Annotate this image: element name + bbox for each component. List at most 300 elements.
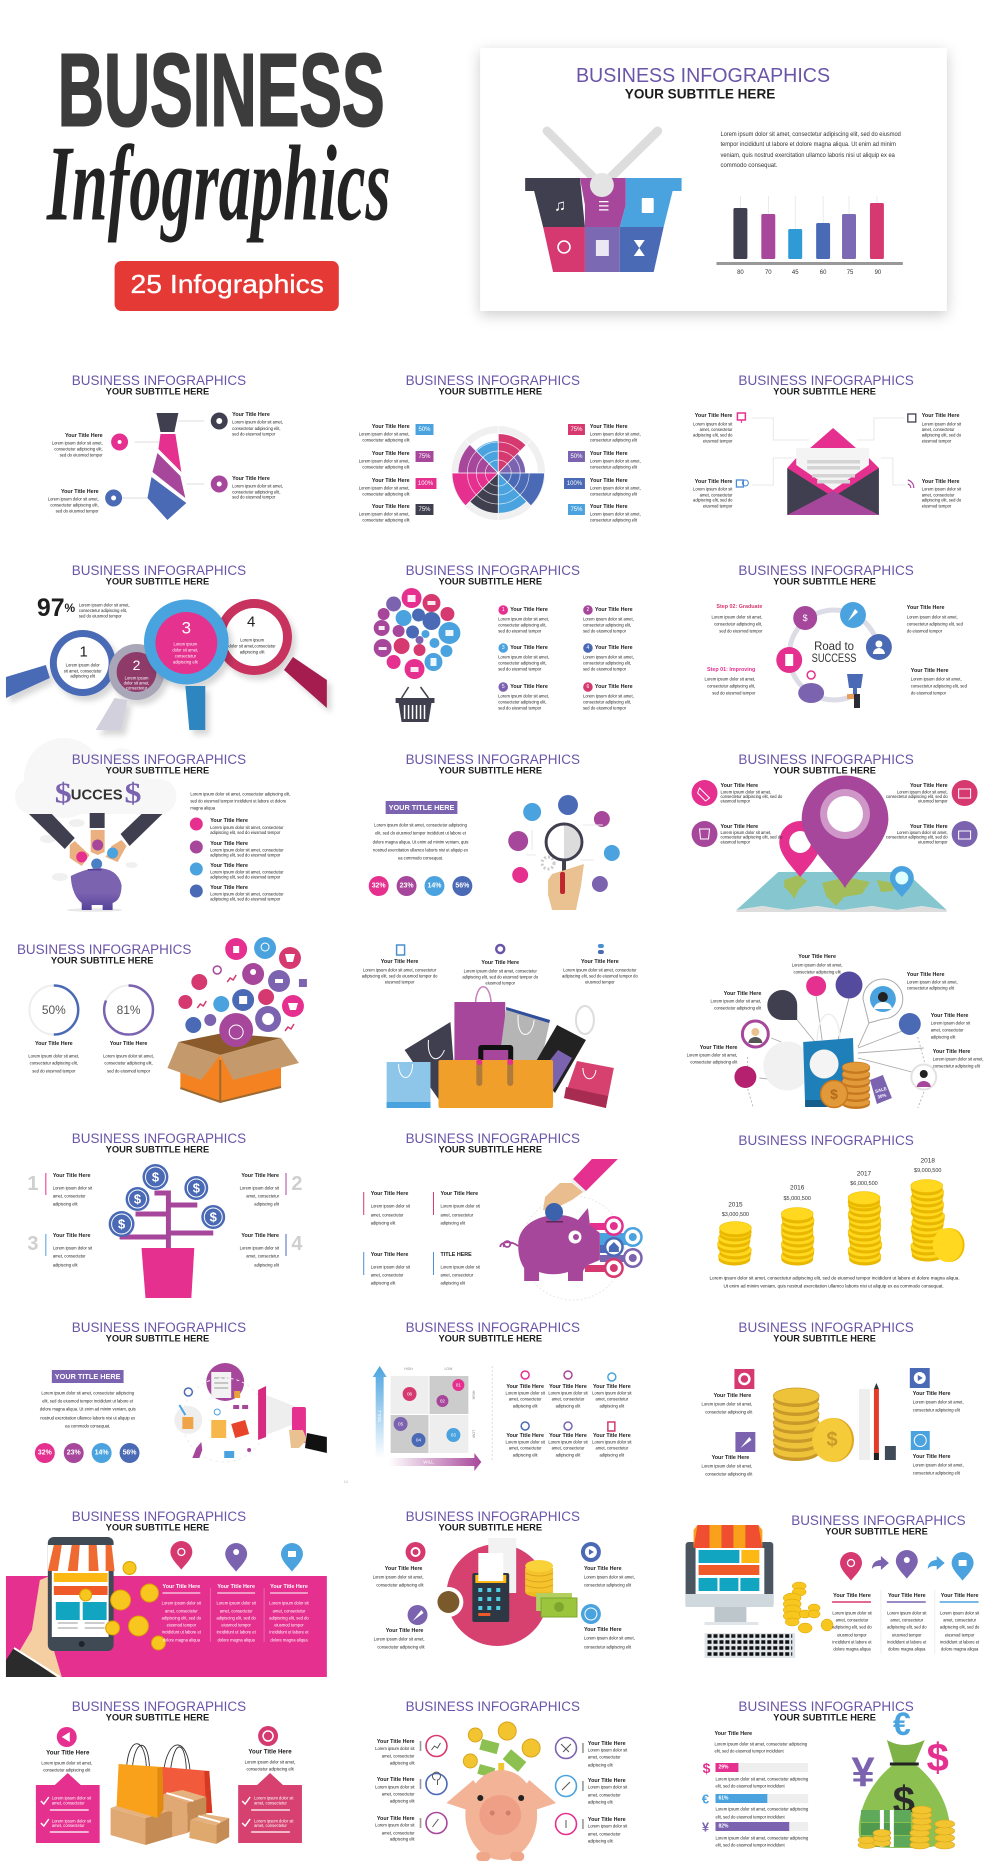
text blocks: adipiscing elit: [254, 1262, 280, 1268]
heading: BUSINESS INFOGRAPHICS: [791, 1512, 966, 1528]
text blocks: Your Title Here: [798, 954, 836, 960]
bar: 29%: $: [703, 1760, 711, 1776]
left text: adipiscing elit: [390, 1836, 415, 1842]
heading: [17, 941, 191, 967]
text blocks: consectetur adipiscing elit: [377, 1644, 425, 1650]
columns: Your Title Here: [941, 1593, 978, 1599]
currency symbols: ¥: [851, 1748, 875, 1796]
heading: BUSINESS INFOGRAPHICS: [72, 1508, 246, 1524]
text blocks: Your Title Here: [913, 1391, 950, 1397]
text columns: adipiscing elit, sed do eiusmod tempor do: [362, 973, 438, 979]
stat: 97%: [37, 594, 130, 622]
text blocks: Lorem ipsum dolor sit amet,: [913, 1462, 964, 1468]
list items: [190, 818, 284, 902]
caption: [710, 1275, 960, 1289]
bar: 61%: [702, 1791, 809, 1820]
text blocks: Your Title Here: [232, 476, 270, 482]
bar: 61%: €: [702, 1791, 709, 1807]
text blocks: Your Title Here: [922, 413, 959, 419]
tags and labels right: consectetur adipiscing elit: [590, 437, 638, 443]
icon: puzzle basket: ☰: [598, 198, 610, 214]
text blocks: [48, 412, 283, 514]
magnifier, hand and icons: [508, 795, 620, 910]
card paragraph: commodo consequat.: [720, 163, 778, 169]
text blocks: Your Title Here: [65, 433, 103, 439]
world map: [736, 872, 947, 912]
heading: BUSINESS INFOGRAPHICS: [406, 1130, 580, 1146]
numbered list: 4: [587, 645, 590, 651]
panel: polar chart: [359, 372, 641, 523]
panel: pink piggy: [375, 1698, 628, 1861]
donut captions: sed do eiusmod tempor: [32, 1068, 76, 1074]
panel: calculator: [373, 1508, 635, 1650]
band columns: dolore magna aliqua: [218, 1637, 256, 1643]
left column: amet, consectetur: [52, 1823, 85, 1828]
heading: BUSINESS INFOGRAPHICS: [72, 1319, 246, 1335]
text blocks: Your Title Here: [714, 1393, 751, 1399]
text columns: eiusmod tempor: [385, 979, 415, 985]
text blocks: consectetur adipiscing elit: [913, 1407, 961, 1413]
tags and labels right: 50%: [571, 454, 583, 460]
currency symbols: €: [893, 1706, 911, 1742]
text blocks: consectetur adipiscing elit: [714, 1005, 762, 1011]
dollar coins: $: [118, 1216, 126, 1232]
text blocks: Lorem ipsum dolor sit amet,: [584, 1635, 635, 1641]
round icons: [406, 1542, 601, 1625]
icon grid: Your Title Here: [593, 1384, 631, 1390]
band columns: amet, consectetur: [220, 1608, 253, 1614]
columns: dolore magna aliqua: [941, 1646, 979, 1652]
columns: incididunt ut labore et: [940, 1639, 980, 1645]
text blocks: consectetur adipiscing elit, sed: [911, 683, 968, 689]
heading: YOUR SUBTITLE HERE: [773, 1333, 876, 1345]
right column: amet, consectetur: [254, 1800, 287, 1806]
bar chart: 90: [875, 270, 882, 276]
columns: amet, consectetur: [836, 1617, 869, 1623]
icon grid: amet, consectetur: [595, 1396, 629, 1402]
numbered list: consectetur adipiscing elit,: [498, 622, 547, 628]
tags and labels right: Lorem ipsum dolor sit amet,: [590, 511, 641, 517]
right text: Lorem ipsum dolor sit: [588, 1784, 628, 1790]
columns: amet, consectetur: [943, 1617, 977, 1623]
icon grid: [505, 1371, 632, 1458]
text blocks: consectetur adipiscing elit,: [50, 502, 99, 508]
list items: Lorem ipsum dolor sit amet, consectetur: [210, 847, 284, 853]
paragraph: nostrud exercitation ullamco laboris nisi ut aliquip ex: [40, 1415, 136, 1421]
heading: [72, 1698, 246, 1724]
numbered list: Your Title Here: [510, 607, 548, 613]
paragraph: nostrud exercitation ullamco laboris nisi ut aliquip ex: [373, 847, 469, 853]
pins and arrows: [840, 1550, 974, 1581]
tags and labels right: Lorem ipsum dolor sit amet,: [590, 458, 641, 464]
donut 81%: [104, 986, 153, 1034]
right column: Lorem ipsum dolor sit amet,: [245, 1759, 295, 1765]
numbered list: Lorem ipsum dolor sit amet,: [498, 654, 549, 660]
cloud backdrop: [15, 738, 176, 818]
coin stack: $: [827, 1429, 838, 1451]
quadrants: 04: [416, 1437, 422, 1443]
icon grid: Lorem ipsum dolor sit: [505, 1390, 546, 1396]
bar: 61%: Lorem ipsum dolor sit amet, consectetur adipiscing: [715, 1806, 809, 1812]
bar: 82%: ¥: [702, 1819, 710, 1835]
magnifier 4: 4: [247, 613, 255, 631]
bar: 29%: [703, 1760, 809, 1789]
text blocks: consectetur adipiscing elit, sed do: [720, 794, 783, 799]
left column: [36, 1727, 100, 1843]
list items: adipiscing elit, sed do eiusmod tempor: [210, 896, 281, 902]
text blocks: eiusmod tempor: [703, 438, 733, 444]
panel: open box: [17, 937, 307, 1102]
band columns: dolore magna aliqua: [270, 1637, 308, 1643]
columns: dolore magna aliqua: [888, 1646, 926, 1652]
numbered list: 3: [502, 645, 505, 651]
numbers: 2: [291, 1173, 303, 1195]
text blocks: eiusmod tempor: [922, 503, 952, 509]
magnifier 1: Lorem ipsum dolor: [66, 662, 100, 668]
text blocks: Lorem ipsum dolor sit amet,: [933, 1056, 984, 1062]
heading: BUSINESS INFOGRAPHICS: [738, 562, 914, 578]
text blocks: Lorem ipsum dolor sit amet,: [911, 676, 962, 682]
icon grid: adipiscing elit: [556, 1452, 581, 1458]
percent circles: 23%: [67, 1449, 82, 1457]
paragraph: sed do eiusmod tempor incididunt ut labore et dolore: [190, 798, 287, 804]
left text: [375, 1739, 415, 1842]
text columns: eiusmod tempor: [485, 980, 516, 986]
panel: magnifiers: [6, 562, 327, 730]
heading: [72, 372, 246, 398]
map pins: [170, 1541, 303, 1572]
text blocks: adipiscing elit: [440, 1280, 466, 1286]
heading: YOUR SUBTITLE HERE: [106, 1144, 209, 1156]
right text: amet, consectetur: [588, 1792, 621, 1798]
text blocks: Lorem ipsum dolor sit amet,: [897, 789, 948, 795]
text blocks: Step 02: Graduate: [716, 604, 762, 610]
band columns: Lorem ipsum dolor sit: [162, 1600, 202, 1606]
text blocks: Lorem ipsum dolor sit amet,: [705, 676, 755, 682]
text blocks: Your Title Here: [712, 1455, 749, 1461]
heading: YOUR SUBTITLE HERE: [438, 765, 542, 777]
text blocks: eiusmod tempor: [703, 503, 733, 509]
text blocks: sed do eiusmod tempor: [719, 628, 763, 634]
bar: 29%: Lorem ipsum dolor sit amet, consectetur adipiscing: [715, 1776, 809, 1782]
heading: YOUR SUBTITLE HERE: [773, 576, 876, 588]
text blocks: Your Title Here: [440, 1191, 478, 1197]
stack 2018: [911, 1180, 965, 1262]
heading: YOUR SUBTITLE HERE: [51, 955, 153, 967]
year labels: $3,000,500: [722, 1212, 749, 1218]
pink band: [6, 1576, 327, 1677]
left column: Lorem ipsum dolor sit: [52, 1795, 92, 1801]
stack 2015: [717, 1222, 751, 1266]
list items: Your Title Here: [210, 863, 248, 869]
megaphone illustration: [174, 1363, 327, 1462]
text blocks: Lorem ipsum dolor sit: [240, 1245, 280, 1251]
columns: incididunt ut labore et: [832, 1639, 872, 1645]
heading: YOUR SUBTITLE HERE: [438, 1522, 542, 1534]
text blocks: Your Title Here: [371, 1252, 408, 1258]
text blocks: Lorem ipsum dolor sit: [53, 1245, 93, 1251]
text blocks: amet, consectetur: [440, 1212, 474, 1218]
text blocks: Your Title Here: [907, 605, 944, 611]
panel: network: [687, 954, 984, 1109]
card heading: [576, 65, 830, 102]
text blocks: consectetur adipiscing elit: [933, 1063, 981, 1069]
numbered list: Lorem ipsum dolor sit amet,: [583, 654, 634, 660]
quadrants: 01: [456, 1382, 461, 1388]
tags and labels left: consectetur adipiscing elit: [362, 491, 410, 497]
donut captions: Lorem ipsum dolor sit amet,: [28, 1053, 79, 1059]
text blocks: Lorem ipsum dolor sit: [240, 1185, 280, 1191]
year labels: $5,000,500: [783, 1196, 811, 1202]
donut captions: [28, 1041, 154, 1074]
band columns: adipiscing elit, sed do: [269, 1615, 309, 1621]
heading: BUSINESS INFOGRAPHICS: [72, 562, 246, 578]
badge: 25 Infographics: 25 Infographics: [131, 271, 324, 299]
tags and labels left: consectetur adipiscing elit: [362, 437, 410, 443]
hand and phone: [6, 1537, 115, 1677]
right text: adipiscing elit: [588, 1799, 614, 1805]
text blocks: Lorem ipsum dolor sit: [440, 1203, 481, 1209]
magnifier 1: [6, 630, 116, 698]
text blocks: adipiscing elit: [53, 1262, 78, 1268]
columns: dolore magna aliqua: [833, 1646, 871, 1652]
numbers: 1: [27, 1173, 38, 1195]
panel: gold coins and pencil: [702, 1319, 964, 1477]
band columns: eiusmod tempor: [167, 1622, 197, 1628]
word: SUCCESS: $: [125, 778, 142, 810]
icon: open cardboard box: [167, 1033, 299, 1102]
heading: YOUR SUBTITLE HERE: [773, 386, 876, 398]
text blocks: [720, 783, 948, 845]
paragraph: Lorem ipsum dolor sit amet, consectetur adipiscing elit,: [190, 791, 291, 797]
magnifier 4: adipiscing elit: [240, 649, 265, 655]
paragraph: dolore magna aliqua. Ut enim ad minim veniam, quis: [373, 839, 468, 845]
columns: adipiscing elit, sed do: [887, 1624, 927, 1630]
magnifier 2: Lorem ipsum: [125, 675, 149, 681]
list items: Your Title Here: [210, 818, 248, 824]
text blocks: Lorem ipsum dolor sit amet,: [232, 483, 283, 489]
text blocks: adipiscing elit, sed do: [922, 497, 962, 503]
heading: YOUR SUBTITLE HERE: [106, 1712, 209, 1724]
text blocks: amet, consectetur: [371, 1212, 404, 1218]
gold coins: [783, 1582, 833, 1633]
text blocks: Your Title Here: [584, 1627, 622, 1633]
heading: BUSINESS INFOGRAPHICS: [738, 751, 914, 767]
numbered list: consectetur adipiscing elit,: [498, 660, 547, 666]
paragraph: ea commodo consequat.: [398, 855, 443, 861]
text blocks: Your Title Here: [695, 413, 732, 419]
tags and labels right: Lorem ipsum dolor sit amet,: [590, 485, 641, 491]
right text: Lorem ipsum dolor sit: [588, 1747, 628, 1753]
text blocks: sed do eiusmod tempor: [232, 494, 276, 500]
panel: shopping bags: [362, 944, 638, 1108]
text blocks: Your Title Here: [371, 1191, 408, 1197]
tags and labels left: consectetur adipiscing elit: [362, 464, 410, 470]
paragraph: magna aliqua: [190, 805, 216, 811]
text blocks: Lorem ipsum dolor sit: [53, 1185, 93, 1191]
quadrants: [391, 1367, 475, 1453]
columns: Lorem ipsum dolor sit: [940, 1610, 980, 1616]
card paragraph: [720, 132, 901, 169]
band columns: dolore magna aliqua: [163, 1637, 201, 1643]
heading: [406, 1319, 580, 1345]
list items: Lorem ipsum dolor sit amet, consectetur: [210, 891, 284, 897]
numbered list: consectetur adipiscing elit,: [498, 699, 547, 705]
heading: YOUR SUBTITLE HERE: [106, 1522, 209, 1534]
tags and labels left: [359, 424, 436, 523]
text blocks: Your Title Here: [232, 412, 270, 418]
heading: [406, 751, 580, 777]
percent circles: 14%: [428, 882, 442, 890]
right column: Lorem ipsum dolor sit: [254, 1795, 294, 1801]
text blocks: consectetur adipiscing elit: [584, 1644, 632, 1650]
left text: Your Title Here: [377, 1777, 415, 1783]
magnifier 2: 2: [133, 657, 141, 673]
paragraph: Lorem ipsum dolor sit amet, consectetur adipiscing: [41, 1390, 135, 1396]
text blocks: Your Title Here: [53, 1173, 90, 1179]
heading: BUSINESS INFOGRAPHICS: [738, 372, 914, 388]
numbered list: Your Title Here: [595, 684, 633, 690]
tags and labels right: Your Title Here: [590, 478, 628, 484]
text blocks: Lorem ipsum dolor sit amet,: [687, 1052, 737, 1058]
columns: [832, 1590, 980, 1654]
heading: BUSINESS INFOGRAPHICS: [406, 1319, 580, 1335]
band columns: amet, consectetur: [165, 1608, 198, 1614]
magnifier 4: dolor sit amet,consectetur: [229, 643, 276, 649]
paragraph: elit, sed do eiusmod tempor incididunt ut labore et: [42, 1398, 134, 1404]
text blocks: adipiscing elit, sed do: [922, 432, 962, 438]
columns: Lorem ipsum dolor sit: [887, 1610, 927, 1616]
numbered list: Your Title Here: [510, 684, 548, 690]
text blocks: sed do eiusmod tempor: [712, 690, 756, 696]
text columns: Lorem ipsum dolor sit amet, consectetur: [563, 967, 637, 973]
percent circles: 56%: [123, 1449, 137, 1457]
text blocks: adipiscing elit: [931, 1034, 956, 1040]
currency symbols: [851, 1706, 949, 1796]
icon grid: Your Title Here: [506, 1433, 544, 1439]
tags and labels left: 75%: [419, 507, 431, 513]
quadrants: LOW: [471, 1430, 475, 1439]
columns: eiusmod tempor: [837, 1632, 867, 1638]
numbered list: sed do eiusmod tempor: [583, 666, 627, 672]
text blocks: Lorem ipsum dolor sit amet,: [712, 614, 762, 620]
tags and labels right: Your Title Here: [590, 504, 628, 510]
text blocks: Lorem ipsum dolor sit amet,: [52, 440, 103, 446]
heading: [791, 1512, 966, 1538]
band columns: adipiscing elit, sed do: [216, 1615, 257, 1621]
icon: piggy and trophy: [798, 671, 863, 708]
numbers: 4: [291, 1233, 303, 1255]
text blocks: do eiusmod tempor: [911, 690, 947, 696]
text columns: eiusmod tempor: [585, 979, 615, 985]
bar: 61%: elit, sed do eiusmod tempor incididunt: [715, 1814, 785, 1820]
left column: Lorem ipsum dolor sit amet,: [41, 1760, 92, 1766]
text blocks: do eiusmod tempor: [907, 628, 943, 634]
dollar coins: $: [152, 1169, 160, 1185]
tags and labels right: 100%: [567, 481, 583, 487]
columns: adipiscing elit, sed do: [832, 1624, 872, 1630]
text blocks: adipiscing elit, sed do: [693, 497, 733, 503]
right text: amet, consectetur: [588, 1831, 621, 1837]
panel: megaphone: [35, 1319, 327, 1463]
side icons: [692, 780, 978, 847]
icon grid: Your Title Here: [506, 1384, 544, 1390]
icon: pink pig: [446, 1770, 556, 1861]
label: Road to Success: Road to: [814, 639, 854, 653]
text blocks: Lorem ipsum dolor sit: [922, 421, 962, 427]
columns: Your Title Here: [833, 1593, 871, 1599]
text blocks: Lorem ipsum dolor sit: [693, 486, 733, 492]
gold coins: [80, 1562, 165, 1650]
icon: puzzle basket: ♫: [554, 197, 566, 215]
magnifier 2: dolor sit amet,: [124, 680, 149, 686]
dollar coins: [109, 1164, 225, 1237]
text blocks: Lorem ipsum dolor sit amet,: [702, 1401, 752, 1407]
text blocks: Your Title Here: [584, 1566, 622, 1572]
quadrants: 02: [440, 1398, 445, 1404]
right text: adipiscing elit: [588, 1762, 614, 1768]
text blocks: sed do eiusmod tempor: [232, 431, 276, 437]
year labels: $9,000,500: [914, 1168, 941, 1174]
icon: basket: [396, 687, 434, 722]
heading: BUSINESS INFOGRAPHICS: [72, 751, 246, 767]
panel: pins and map: [692, 751, 978, 912]
heading: YOUR SUBTITLE HERE: [106, 576, 209, 588]
text blocks: sed do eiusmod tempor: [60, 452, 103, 458]
stat: 97%: sed do eiusmod tempor: [79, 613, 122, 619]
text blocks: Lorem ipsum dolor sit amet,: [720, 830, 771, 835]
magnifier 3: [144, 600, 229, 730]
calculator illustration: [433, 1538, 577, 1646]
text blocks: eiusmod tempor: [918, 839, 948, 845]
text blocks: adipiscing elit: [371, 1280, 396, 1286]
tags and labels left: Lorem ipsum dolor sit amet,: [359, 485, 410, 491]
icon grid: Your Title Here: [593, 1433, 631, 1439]
panel: skill matrix: [344, 1319, 632, 1484]
text blocks: [702, 1391, 964, 1477]
right text: Your Title Here: [588, 1817, 626, 1823]
nodes: [734, 972, 936, 1090]
columns: Lorem ipsum dolor sit: [832, 1610, 873, 1616]
title tag: [52, 1370, 124, 1383]
badge: 25 Infographics: [115, 261, 339, 311]
list items: Lorem ipsum dolor sit amet, consectetur: [210, 869, 284, 875]
text blocks: Lorem ipsum dolor sit amet,: [913, 1399, 964, 1405]
main title: BUSINESS: BUSINESS: [58, 32, 385, 148]
text blocks: consectetur adipiscing elit,: [714, 621, 762, 627]
quadrants: 05: [398, 1421, 404, 1427]
numbered list: 1: [502, 607, 505, 613]
right column: consectetur adipiscing elit: [246, 1766, 294, 1772]
icon: piggy bank: [67, 868, 123, 912]
quadrants: 03: [451, 1432, 456, 1438]
text blocks: Your Title Here: [700, 1045, 737, 1051]
columns: eiusmod tempor: [945, 1632, 975, 1638]
text blocks: Your Title Here: [241, 1173, 279, 1179]
band columns: incididunt ut labore et: [217, 1629, 257, 1635]
columns: adipiscing elit, sed do: [940, 1624, 980, 1630]
numbered list: sed do eiusmod tempor: [498, 666, 542, 672]
text columns: Your Title Here: [381, 959, 418, 965]
title tag: [386, 801, 457, 814]
text blocks: eiusmod tempor: [922, 438, 952, 444]
tags and labels left: 50%: [419, 427, 431, 433]
bar chart: 70: [765, 270, 772, 276]
text blocks: [693, 413, 962, 509]
left column: Your Title Here: [46, 1749, 90, 1757]
numbered list: 6: [587, 684, 590, 690]
tags and labels right: 75%: [571, 507, 583, 513]
